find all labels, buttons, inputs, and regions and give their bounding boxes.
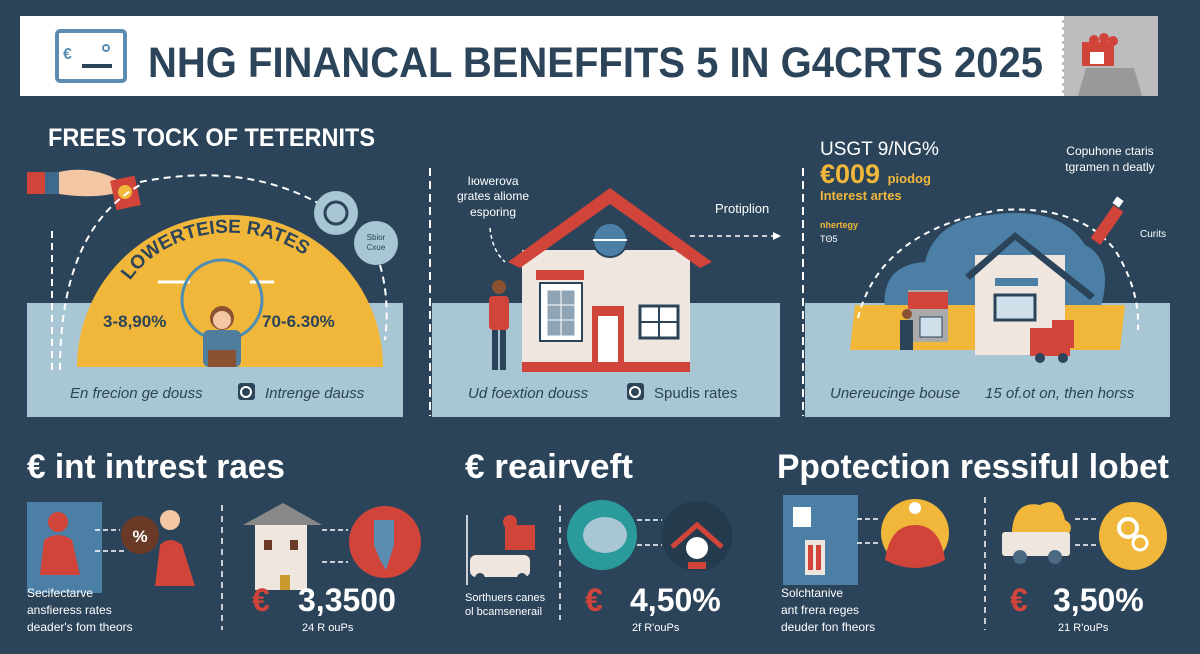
heading: section 1: FREES TOCK OF TETERNITS — [48, 124, 375, 152]
panel: bottom 1 — [27, 502, 195, 634]
heading: protection: Ppotection ressiful lobet — [777, 448, 1169, 486]
divider — [802, 168, 804, 416]
icon: gear circles — [314, 191, 398, 265]
panel: house — [432, 174, 781, 417]
icon: hand with card — [27, 170, 141, 210]
title: NHG FINANCAL BENEFFITS 5 IN G4CRTS 2025 — [148, 39, 1043, 87]
header banner — [20, 16, 1158, 96]
caption: En frecion ge douss — [70, 385, 203, 402]
panel: house: Protiplion — [715, 201, 769, 216]
panel: bottom 3: Sorthuers canes — [465, 592, 546, 604]
icon: gear circles: Cxue — [367, 243, 386, 252]
panel: house: Spudis rates — [654, 385, 737, 402]
panel: interest rates house: Copuhone ctaris — [1066, 144, 1154, 158]
panel: bottom 1: ansfieress rates — [27, 603, 112, 617]
icon: house — [508, 188, 712, 372]
chart: yellow semicircle: 3-8,90% — [103, 312, 166, 331]
panel: interest rates house: €009 piodog — [820, 159, 931, 189]
icon: cloud and house — [850, 213, 1125, 363]
chart: yellow semicircle: 70-6.30% — [262, 312, 335, 331]
panel: bottom 1: deader's fom theors — [27, 620, 133, 634]
panel: bottom 4: deuder fon fheors — [781, 620, 875, 634]
panel: bottom 3: € — [585, 582, 603, 618]
panel: bottom 3: 4,50% — [630, 582, 721, 618]
panel: interest rates house: 15 of.ot on, then horss — [985, 385, 1135, 402]
panel: house: Ud foextion douss — [468, 385, 589, 402]
panel: bottom 5: 21 R'ouPs — [1058, 622, 1109, 634]
panel: bottom 5: € — [1010, 582, 1028, 618]
chart: yellow semicircle: LOWERTEISE RATES — [120, 220, 310, 280]
arrow: dashed arc — [858, 210, 1138, 330]
icon: euro card — [57, 31, 125, 81]
panel: interest rates house: Interest artes — [820, 188, 902, 203]
panel: lower rates — [27, 215, 403, 417]
panel: interest rates house: TΘ5 — [820, 234, 838, 244]
panel: interest rates house: Curits — [1140, 229, 1166, 240]
panel: interest rates house: tgramen n deatly — [1065, 160, 1155, 174]
icon: person — [489, 280, 509, 370]
panel: bottom 2: 24 R ouPs — [302, 622, 354, 634]
panel: interest rates house — [805, 139, 1170, 417]
panel: bottom 4: ant frera reges — [781, 603, 859, 617]
panel: bottom 4: Solchtanive — [781, 586, 843, 600]
panel: bottom 2: € — [252, 582, 270, 618]
panel: lower rates: Intrenge dauss — [265, 385, 365, 402]
panel: bottom 1: % — [132, 527, 148, 546]
panel: bottom 2: 3,3500 — [298, 582, 396, 618]
panel: bottom 4 — [781, 495, 949, 634]
arrow — [690, 232, 781, 240]
icon: building — [1078, 33, 1142, 96]
panel: bottom 2 — [243, 503, 421, 634]
icon: euro card: € — [63, 46, 72, 63]
panel: bottom 1: Secifectarve — [27, 586, 93, 600]
heading: interest rates: € int intrest raes — [27, 448, 285, 486]
panel: bottom 3: 2f R'ouPs — [632, 622, 680, 634]
panel: bottom 3 — [465, 500, 732, 634]
panel: bottom 5 — [1002, 502, 1167, 634]
text block: grates aliome — [457, 189, 529, 203]
panel: bottom 3: ol bcamsenerail — [465, 606, 542, 618]
divider — [429, 168, 431, 416]
icon: gear circles: Sbior — [367, 233, 386, 242]
panel: interest rates house: Unereucinge bouse — [830, 385, 960, 402]
text block: USGT 9/NG% — [820, 139, 939, 160]
arrow: dashed arc — [52, 175, 387, 370]
text block: esporing — [470, 205, 516, 219]
panel: interest rates house: nhertegy — [820, 220, 858, 230]
panel: bottom 5: 3,50% — [1053, 582, 1144, 618]
chart: yellow semicircle — [77, 215, 383, 367]
text block — [457, 174, 529, 219]
heading: reairveft: € reairveft — [465, 448, 633, 486]
text block: Iюwerova — [467, 174, 519, 188]
icon: marker — [1091, 196, 1124, 245]
